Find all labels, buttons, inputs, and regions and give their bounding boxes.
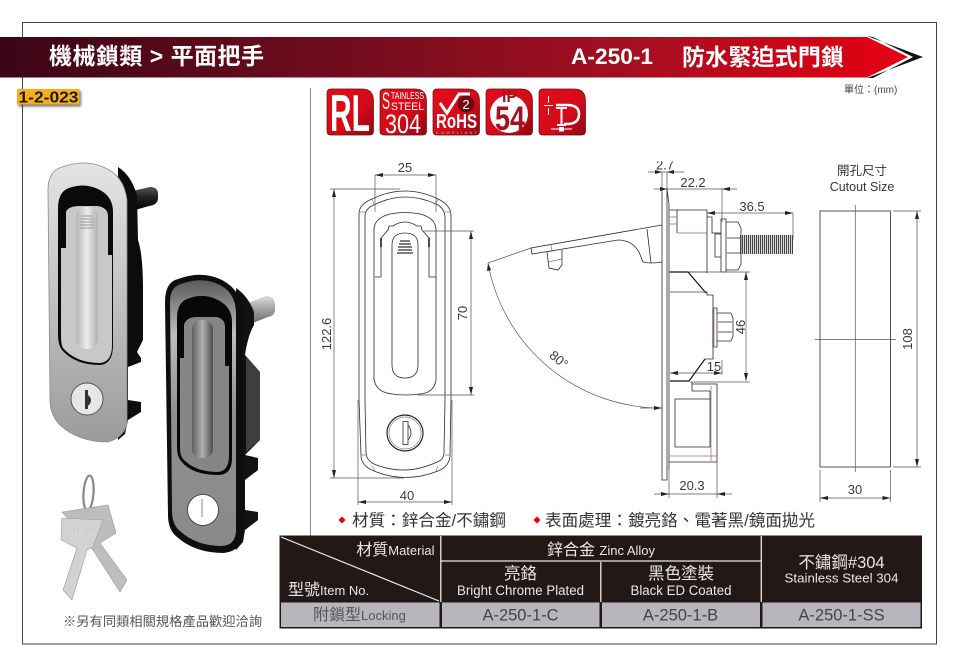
cell: A-250-1-B: A-250-1-B (643, 606, 718, 624)
header: stainless steel: Stainless Steel 304 (784, 572, 899, 586)
dimension 2.7: 2.7 (656, 158, 674, 172)
row label: locking: 附鎖型Locking (313, 606, 406, 624)
front view drawing (359, 191, 451, 478)
header: bright chrome: 亮鉻 (504, 564, 537, 583)
key brand: ANGUI (68, 528, 96, 539)
note: surface: 表面處理：鍍亮鉻、電著黑/鏡面拋光 (545, 510, 815, 530)
black backing (118, 167, 143, 440)
header: black coated (630, 564, 732, 598)
dimension 122.6: 122.6 (319, 318, 334, 350)
grip ridges (397, 241, 413, 253)
open handle (531, 225, 662, 270)
mask above dimension 2.7 (650, 150, 690, 162)
dimension 80 degrees: 80° (547, 347, 571, 372)
icon: stainless steel 304: 304 (385, 109, 421, 139)
handle recess (392, 233, 418, 378)
cell: A-250-1-SS: A-250-1-SS (798, 606, 885, 624)
model number: A-250-1 (571, 44, 653, 69)
icon: stainless steel 304: STEEL (391, 101, 424, 113)
header: bright chrome: Bright Chrome Plated (457, 583, 584, 598)
grip ridges (80, 216, 94, 228)
icon: RL: RL (330, 85, 370, 143)
header: zinc alloy: 鋅合金 Zinc Alloy (547, 541, 656, 559)
icon: clamp (539, 89, 586, 135)
cutout heading: 開孔尺寸 (837, 164, 887, 178)
icon: stainless steel 304 (380, 88, 426, 139)
threaded bolt (740, 235, 793, 254)
chrome plate (48, 163, 127, 442)
product photo: chrome lock (48, 163, 158, 442)
unit note: 單位：(mm) (844, 83, 897, 96)
black plate (165, 275, 243, 553)
arrow chevron (867, 36, 923, 78)
icon: stainless steel 304: S (382, 88, 390, 115)
back key (62, 505, 127, 592)
dimensions: side view (487, 150, 793, 498)
cutout drawing (815, 205, 921, 502)
gray face (170, 280, 236, 546)
dimension 25: 25 (398, 160, 412, 175)
pocket (58, 186, 113, 365)
side view drawing (531, 189, 793, 480)
dimension 40: 40 (400, 488, 414, 503)
vertical divider (310, 88, 312, 536)
icon: stainless steel 304: TAINLESS (391, 91, 424, 102)
body outlines (359, 191, 451, 478)
product photo: keys (61, 475, 127, 600)
product photo: black lock (165, 275, 275, 553)
pocket (177, 296, 232, 475)
icon: RoHS 2: RoHS (436, 111, 477, 133)
front key (61, 518, 103, 600)
lower block (670, 272, 706, 293)
upper block (669, 210, 721, 273)
dimension 20.3: 20.3 (679, 478, 705, 493)
material notes (338, 510, 815, 530)
header: material: 材質Material (356, 541, 435, 559)
handle bar (192, 320, 213, 458)
header: stainless steel (784, 553, 899, 586)
cutout heading (830, 164, 894, 194)
product name: 防水緊迫式門鎖 (682, 44, 844, 70)
icon: RL (327, 85, 374, 143)
footnote: ※另有同類相關規格產品歡迎洽詢 (63, 613, 262, 629)
key cylinder (188, 494, 218, 526)
small nut (713, 308, 733, 347)
mounting plate (662, 189, 669, 480)
dimension 36.5: 36.5 (739, 199, 765, 214)
dimension 70: 70 (455, 306, 470, 320)
icon: IP54: IP (502, 87, 517, 106)
header: bright chrome (457, 564, 584, 598)
note: material: 材質：鋅合金/不鏽鋼 (352, 511, 506, 530)
cutout heading: Cutout Size (830, 180, 894, 194)
pocket (374, 212, 436, 395)
header: item no: 型號Item No. (288, 581, 369, 599)
certification icons (327, 85, 586, 143)
key ring (82, 475, 95, 511)
washer and nut (715, 219, 741, 272)
specification table (280, 536, 922, 628)
dimensions: front view (319, 160, 474, 505)
dimension 108: 108 (900, 328, 915, 350)
header: stainless steel: 不鏽鋼#304 (798, 553, 885, 572)
lever (61, 206, 112, 363)
dimension 22.2: 22.2 (680, 175, 706, 190)
black backing (236, 288, 260, 550)
dimension 46: 46 (733, 320, 748, 334)
mounting post (128, 187, 158, 212)
icon: IP54 (486, 87, 532, 138)
handle bar (76, 207, 98, 349)
icon: IP54: 54 (495, 100, 525, 138)
key cylinder (387, 415, 423, 451)
catalog code badge: 1-2-023 (18, 90, 79, 106)
icon: RoHS 2 (433, 89, 480, 135)
category heading: 機械鎖類 > 平面把手 (49, 43, 264, 69)
cell: A-250-1-C: A-250-1-C (482, 606, 559, 624)
mounting post (240, 296, 275, 326)
key cylinder (71, 383, 103, 415)
lever (375, 222, 436, 277)
lever (180, 317, 229, 472)
header: black coated: 黑色塗裝 (648, 564, 714, 583)
dimension 15: 15 (707, 359, 721, 374)
icon: RoHS 2: 2 (462, 97, 470, 112)
header: black coated: Black ED Coated (630, 583, 732, 598)
corner ticks (360, 199, 451, 471)
icon: RoHS 2: COMPLIANT (436, 130, 478, 135)
header banner (0, 36, 923, 78)
dimension 30: 30 (848, 482, 862, 497)
